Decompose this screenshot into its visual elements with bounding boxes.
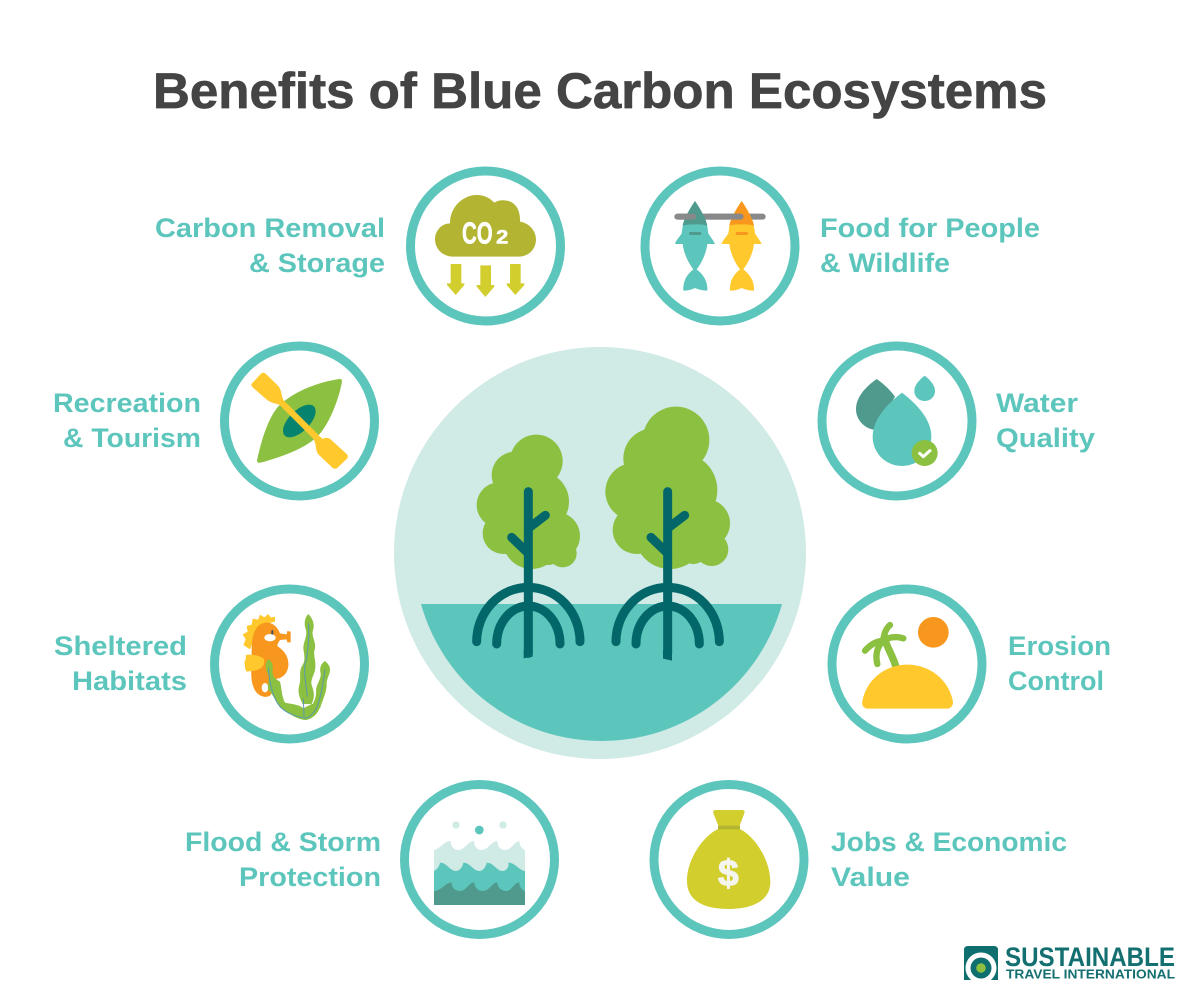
label: Carbon Removal bbox=[155, 213, 385, 243]
icon: CO2 cloud with arrows: 2 bbox=[496, 227, 508, 248]
icon: hanging fish bbox=[675, 201, 763, 291]
ring bbox=[654, 784, 804, 934]
label bbox=[155, 213, 385, 278]
logo mark bbox=[964, 946, 998, 984]
label bbox=[53, 388, 201, 453]
ring bbox=[404, 784, 554, 934]
label bbox=[831, 827, 1067, 892]
logo: Sustainable Travel International bbox=[964, 942, 1175, 984]
label: Recreation bbox=[53, 388, 201, 418]
logo wordmark: SUSTAINABLE bbox=[1005, 942, 1175, 972]
label: Jobs & Economic bbox=[831, 827, 1067, 857]
label bbox=[54, 631, 187, 696]
ring bbox=[645, 171, 795, 321]
label: Quality bbox=[996, 423, 1095, 453]
label: Habitats bbox=[72, 666, 187, 696]
label bbox=[996, 388, 1095, 453]
benefit: jobs and economic value bbox=[654, 784, 1067, 934]
label: Control bbox=[1008, 666, 1104, 696]
icon: money bag: $ bbox=[718, 852, 739, 894]
ring bbox=[822, 346, 972, 496]
background circle bbox=[394, 347, 806, 759]
left mangrove tree bbox=[477, 435, 580, 658]
benefit: water quality bbox=[822, 346, 1095, 496]
ring bbox=[832, 589, 982, 739]
label: Protection bbox=[239, 862, 381, 892]
icon: water drops with check bbox=[856, 376, 938, 466]
logo wordmark bbox=[1005, 942, 1175, 982]
icon: island with palm and sun bbox=[862, 617, 953, 709]
icon: CO2 cloud with arrows bbox=[435, 195, 536, 297]
ring bbox=[224, 346, 374, 496]
icon: waves bbox=[434, 821, 525, 905]
label: Flood & Storm bbox=[185, 827, 381, 857]
label: Food for People bbox=[820, 213, 1040, 243]
label: & Storage bbox=[249, 248, 385, 278]
ring bbox=[410, 171, 560, 321]
right mangrove tree bbox=[605, 407, 730, 661]
ring bbox=[214, 589, 364, 739]
label: Erosion bbox=[1008, 631, 1111, 661]
benefit: flood and storm protection bbox=[185, 784, 554, 934]
label: Value bbox=[831, 862, 910, 892]
label: Water bbox=[996, 388, 1079, 418]
icon: kayak and paddle bbox=[251, 373, 348, 469]
label bbox=[820, 213, 1040, 278]
icon: money bag bbox=[687, 810, 770, 909]
benefit: erosion control bbox=[832, 589, 1111, 739]
logo wordmark: TRAVEL INTERNATIONAL bbox=[1006, 968, 1175, 982]
benefit: sheltered habitats bbox=[54, 589, 364, 739]
benefit: recreation and tourism bbox=[53, 346, 374, 496]
label: Sheltered bbox=[54, 631, 187, 661]
benefit: food for people and wildlife bbox=[645, 171, 1040, 321]
central illustration: mangroves bbox=[394, 347, 806, 759]
label: & Tourism bbox=[63, 423, 201, 453]
icon: seahorse and seaweed bbox=[243, 614, 330, 720]
benefit: carbon removal and storage bbox=[155, 171, 560, 321]
water bbox=[421, 604, 782, 741]
label bbox=[185, 827, 381, 892]
label bbox=[1008, 631, 1111, 696]
label: & Wildlife bbox=[820, 248, 950, 278]
icon: CO2 cloud with arrows: CO bbox=[462, 216, 493, 250]
title: Benefits of Blue Carbon Ecosystems bbox=[153, 63, 1047, 119]
